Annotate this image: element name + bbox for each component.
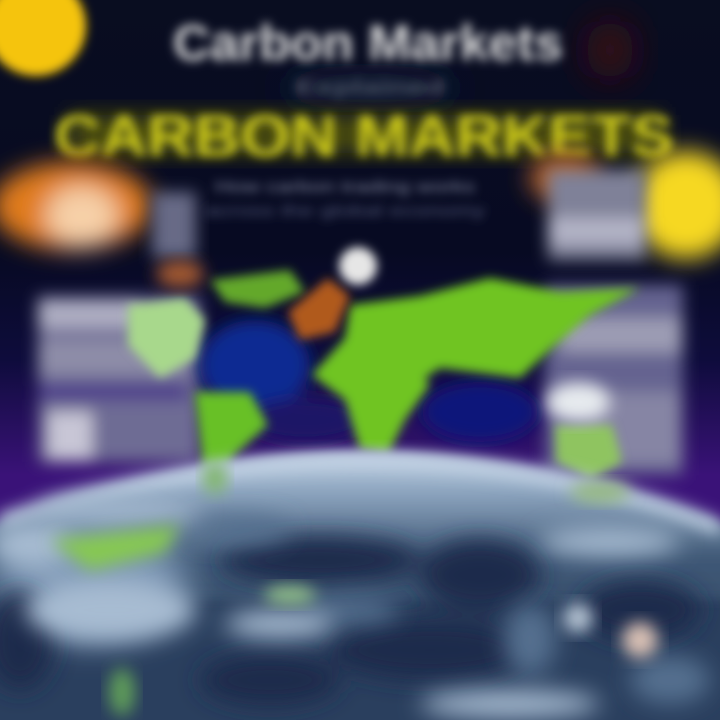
headline glow bbox=[70, 115, 660, 153]
intro text block: across the global economy bbox=[205, 203, 485, 220]
sun: right yellow bbox=[529, 151, 720, 259]
earth: green land small bbox=[264, 585, 316, 605]
continent: north america bbox=[128, 298, 205, 378]
intro text block bbox=[205, 179, 485, 220]
earth: green land bottom bbox=[109, 668, 135, 716]
map: world continents bbox=[128, 270, 640, 492]
earth: green land left bbox=[50, 525, 180, 570]
earth globe bbox=[0, 452, 720, 720]
continent: eurasia bbox=[340, 278, 640, 385]
earth: dark cloud patches bbox=[0, 536, 700, 706]
earth: warm light spot bbox=[622, 622, 658, 658]
headline: CARBON MARKETS bbox=[54, 104, 674, 169]
continent: south america bbox=[195, 392, 268, 492]
icon: white marker top bbox=[339, 247, 377, 285]
earth: upper disc bbox=[0, 452, 720, 600]
intro text block: How carbon trading works bbox=[215, 179, 475, 196]
earth: bright atmosphere rim bbox=[0, 460, 720, 528]
sun: top left bbox=[0, 0, 86, 76]
continent: africa bbox=[312, 338, 430, 455]
panel: right bbox=[545, 285, 683, 475]
icon: white marker right bbox=[546, 382, 610, 422]
earth: green land near australia bbox=[570, 481, 630, 503]
earth: mid tone patches bbox=[190, 516, 710, 704]
subtitle: Explained bbox=[295, 77, 445, 99]
dark blue glow: behind subtitle bbox=[280, 76, 460, 100]
earth: light spot bbox=[563, 603, 593, 633]
earth: light cloud patches bbox=[0, 498, 680, 718]
sun: left orange bbox=[0, 162, 152, 250]
panel: left bbox=[38, 296, 200, 462]
map: rust patch bbox=[156, 260, 204, 288]
earth: lower base bbox=[0, 570, 720, 720]
earth: light left region bbox=[0, 520, 185, 640]
panel: top right bbox=[548, 170, 646, 260]
title: Carbon Markets bbox=[173, 15, 563, 71]
map: dark ocean bbox=[200, 320, 538, 442]
panel: top left grey strip bbox=[152, 192, 196, 258]
dark red glow: top right bbox=[586, 20, 634, 80]
continent: australia bbox=[555, 425, 622, 480]
map: orange highlight bbox=[288, 278, 350, 340]
earth: south america tip bbox=[203, 462, 227, 494]
